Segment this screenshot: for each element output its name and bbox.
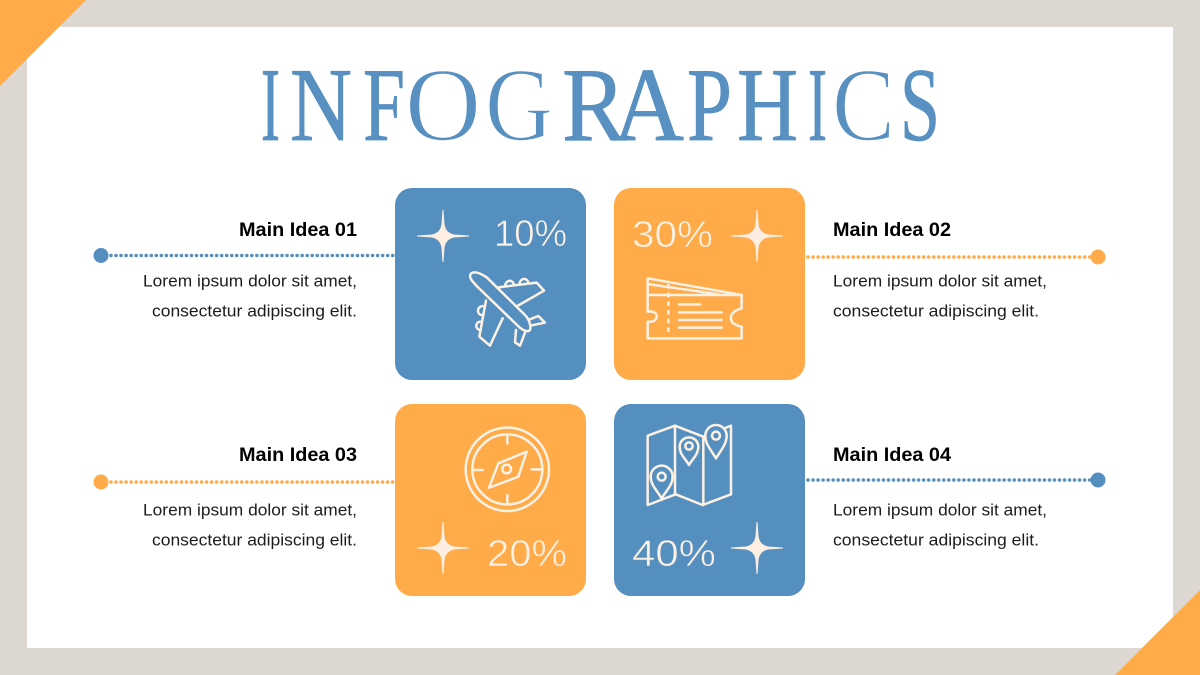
title: I — [808, 46, 827, 163]
panel: card 20% — [395, 404, 586, 596]
icon: airplane — [470, 272, 545, 346]
icon: sparkle 2 — [731, 210, 783, 262]
top-left orange corner — [0, 0, 86, 86]
title: O — [405, 46, 481, 163]
body text 04 — [833, 500, 1047, 550]
panel: card 10% — [395, 188, 586, 380]
icon: sparkle 3 — [417, 522, 469, 574]
item: Main Idea 01 — [94, 219, 393, 320]
connector line 04 — [808, 472, 1106, 488]
body text 03: consectetur adipiscing elit. — [152, 530, 357, 550]
bottom-right orange corner — [1115, 590, 1200, 675]
item: Main Idea 02 — [808, 219, 1106, 320]
body text 01: consectetur adipiscing elit. — [152, 302, 357, 320]
heading 01: Main Idea 01 — [239, 219, 357, 241]
icon: sparkle 1 — [417, 210, 469, 262]
connector line 01 — [94, 248, 393, 263]
item: Main Idea 03 — [94, 444, 393, 550]
title: I — [261, 46, 280, 163]
title: H — [737, 46, 798, 163]
percent 30%: 30% — [632, 214, 713, 255]
icon: sparkle 4 — [731, 522, 783, 574]
icon: compass — [466, 428, 549, 511]
item: Main Idea 04 — [808, 444, 1106, 550]
connector line 03 — [94, 474, 393, 490]
connector line 02 — [808, 250, 1106, 264]
title: G — [485, 46, 553, 163]
body text 04: consectetur adipiscing elit. — [833, 530, 1039, 550]
body text 02: consectetur adipiscing elit. — [833, 302, 1039, 320]
title: P — [687, 46, 732, 163]
body text 04: Lorem ipsum dolor sit amet, — [833, 500, 1047, 520]
body text 03 — [143, 500, 357, 550]
percent 10%: 10% — [494, 213, 567, 254]
title: C — [832, 46, 895, 163]
panel: card 40% — [614, 404, 805, 596]
body text 02: Lorem ipsum dolor sit amet, — [833, 272, 1047, 290]
icon: ticket — [648, 278, 742, 338]
title: R — [562, 46, 626, 163]
body text 02 — [833, 272, 1047, 320]
body text 01: Lorem ipsum dolor sit amet, — [143, 272, 357, 290]
heading 02: Main Idea 02 — [833, 219, 951, 241]
title: N — [290, 46, 352, 163]
percent 40%: 40% — [632, 533, 716, 574]
title: F — [363, 46, 405, 163]
title: A — [613, 46, 684, 163]
body text 01 — [143, 272, 357, 320]
body text 03: Lorem ipsum dolor sit amet, — [143, 500, 357, 520]
heading 04: Main Idea 04 — [833, 444, 951, 466]
title: S — [900, 46, 940, 163]
panel: card 30% — [614, 188, 805, 380]
icon: folded map with pins — [648, 425, 731, 505]
heading 03: Main Idea 03 — [239, 444, 357, 466]
percent 20%: 20% — [487, 533, 567, 574]
